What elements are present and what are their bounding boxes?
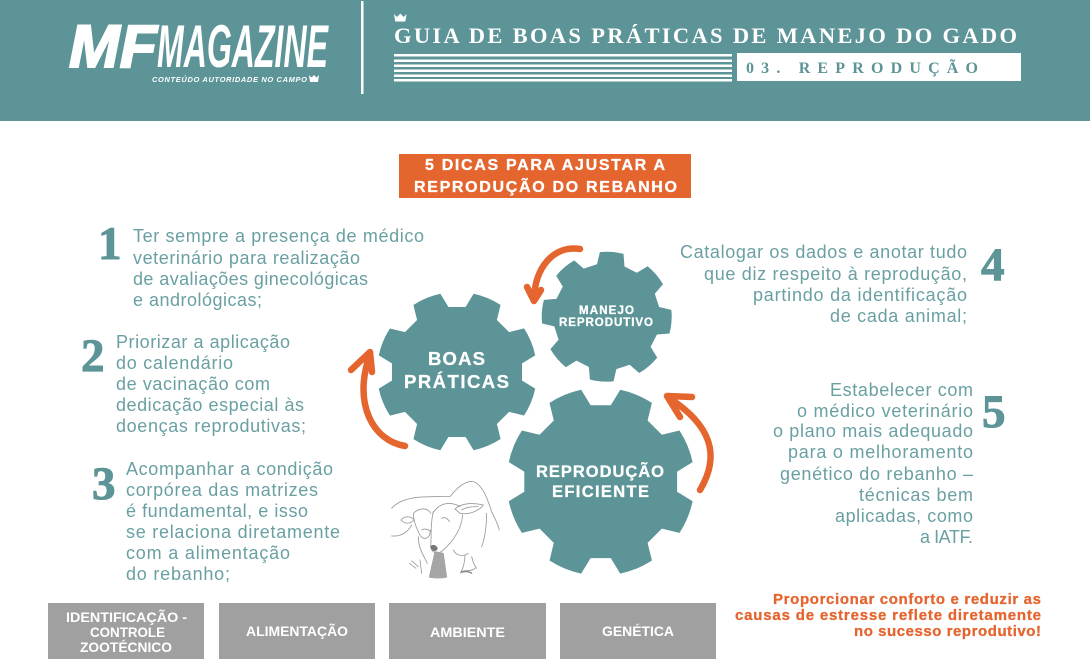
- tip 5: genético do rebanho –: [780, 464, 973, 484]
- box: ambiente: [389, 603, 546, 659]
- section tag: 03. REPRODUÇÃO: [746, 58, 978, 77]
- tip 3: se relaciona diretamente: [126, 522, 340, 542]
- header banner: [0, 0, 1090, 121]
- arrow: manejo to boas práticas: [527, 249, 580, 301]
- gear: boas práticas: [353, 268, 561, 476]
- tip 2: 2: [81, 330, 104, 382]
- logo: MF Magazine: CONTEÚDO AUTORIDADE NO CAMPO: [152, 75, 307, 84]
- gear: boas práticas: PRÁTICAS: [404, 371, 509, 392]
- callout: [735, 591, 1041, 640]
- heading: 5 dicas: REPRODUÇÃO DO REBANHO: [414, 176, 677, 196]
- tip 1: Ter sempre a presença de médico: [133, 226, 424, 246]
- tip 3: com a alimentação: [126, 543, 290, 563]
- tip 3: do rebanho;: [126, 564, 230, 584]
- tip 5: o médico veterinário: [797, 401, 973, 421]
- tip 5: aplicadas, como: [835, 506, 973, 526]
- box: identificação: IDENTIFICAÇÃO -: [66, 610, 187, 625]
- box: identificação: [48, 603, 204, 659]
- tip 2: dedicação especial às: [116, 395, 304, 415]
- gear: manejo reprodutivo: MANEJO: [579, 305, 634, 317]
- tip 3: Acompanhar a condição: [126, 459, 333, 479]
- gear: manejo reprodutivo: [537, 247, 677, 387]
- divider: [361, 1, 364, 94]
- category boxes: [48, 603, 716, 659]
- tip 4: 4: [981, 239, 1004, 291]
- callout: no sucesso reprodutivo!: [854, 623, 1041, 640]
- box: ambiente: AMBIENTE: [430, 625, 505, 640]
- box: alimentação: [219, 603, 375, 659]
- tip 5: técnicas bem: [859, 485, 973, 505]
- tip 4: Catalogar os dados e anotar tudo: [680, 242, 967, 262]
- tip 2: [81, 330, 306, 436]
- tip 1: [98, 218, 424, 310]
- tip 3: 3: [92, 458, 116, 510]
- tip 5: a IATF.: [920, 527, 973, 547]
- tip 3: é fundamental, e isso: [126, 501, 308, 521]
- tip 5: [773, 380, 1006, 547]
- guide title: GUIA DE BOAS PRÁTICAS DE MANEJO DO GADO: [394, 23, 1017, 48]
- tip 4: que diz respeito à reprodução,: [704, 264, 967, 284]
- logo: MF Magazine: MF: [69, 13, 158, 80]
- arrow: reprodução to manejo: [667, 396, 711, 490]
- tip 1: veterinário para realização: [133, 248, 360, 268]
- tip 1: de avaliações ginecológicas: [133, 269, 368, 289]
- callout: causas de estresse reflete diretamente: [735, 607, 1041, 624]
- tip 4: de cada animal;: [830, 306, 967, 326]
- logo: MF Magazine: [69, 13, 329, 84]
- section tag: [737, 53, 1021, 81]
- tip 2: doenças reprodutivas;: [116, 416, 306, 436]
- tip 5: Estabelecer com: [830, 380, 973, 400]
- tip 2: do calendário: [116, 353, 233, 373]
- box: identificação: ZOOTÉCNICO: [80, 640, 172, 655]
- arrow: boas práticas up: [351, 352, 405, 446]
- gear: reprodução eficiente: REPRODUÇÃO: [536, 461, 664, 481]
- tip 3: [92, 458, 340, 584]
- box: genética: GENÉTICA: [602, 624, 674, 639]
- tip 1: e andrológicas;: [133, 290, 262, 310]
- tip 4: [680, 239, 1004, 326]
- tip 4: partindo da identificação: [753, 285, 967, 305]
- box: genética: [560, 603, 716, 659]
- illustration: cow and calf: [392, 481, 499, 578]
- gear: manejo reprodutivo: REPRODUTIVO: [559, 317, 653, 329]
- tip 5: 5: [982, 386, 1006, 438]
- heading: 5 dicas: [399, 154, 691, 198]
- gear: boas práticas: BOAS: [428, 348, 485, 369]
- decorative stripes: [394, 54, 732, 82]
- box: alimentação: ALIMENTAÇÃO: [246, 624, 348, 639]
- tip 5: o plano mais adequado: [773, 421, 973, 441]
- gear: reprodução eficiente: [478, 359, 723, 604]
- logo: MF Magazine: MAGAZINE: [157, 13, 329, 80]
- tip 3: corpórea das matrizes: [126, 480, 318, 500]
- tip 2: de vacinação com: [116, 374, 270, 394]
- tip 5: para o melhoramento: [788, 442, 973, 462]
- icon: crown: [394, 14, 407, 22]
- callout: Proporcionar conforto e reduzir as: [773, 591, 1041, 608]
- heading: 5 dicas: 5 DICAS PARA AJUSTAR A: [425, 157, 665, 174]
- box: identificação: CONTROLE: [90, 625, 165, 640]
- tip 2: Priorizar a aplicação: [116, 332, 290, 352]
- tip 1: 1: [98, 218, 122, 270]
- gear: reprodução eficiente: EFICIENTE: [552, 483, 649, 501]
